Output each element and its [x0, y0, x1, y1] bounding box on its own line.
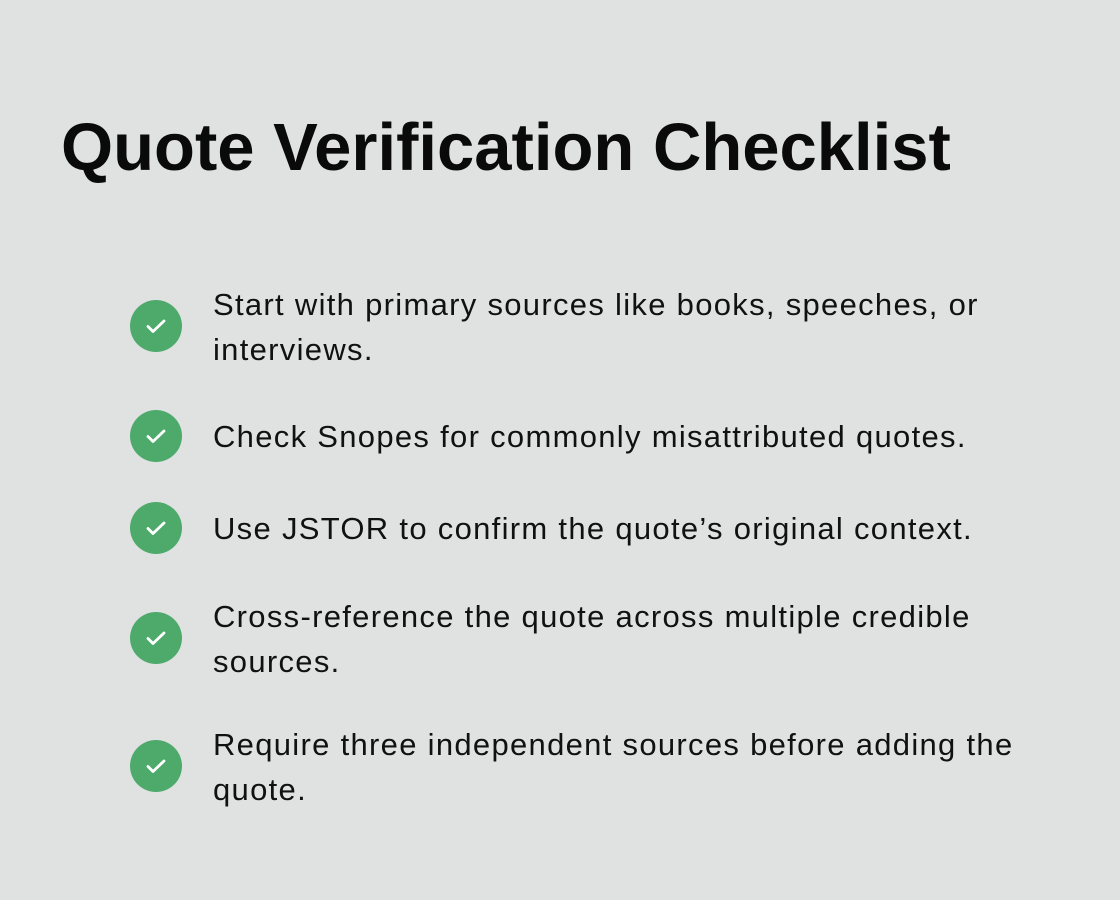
icon: check 4: [130, 612, 182, 664]
item 1: [130, 287, 979, 367]
text 4: Cross-reference the quote across multiple credible: [213, 599, 971, 634]
item 5: [130, 727, 1014, 807]
icon: check 3: [130, 502, 182, 554]
text 4: [213, 599, 971, 679]
text 5: quote.: [213, 772, 307, 807]
text 2: Check Snopes for commonly misattributed quotes.: [213, 419, 967, 454]
item 4: [130, 599, 971, 679]
text 1: Start with primary sources like books, speeches, or: [213, 287, 979, 322]
item 3: [130, 502, 973, 554]
item 2: [130, 410, 967, 462]
text 1: [213, 287, 979, 367]
text 4: sources.: [213, 644, 341, 679]
title: Quote Verification Checklist: [61, 110, 951, 185]
text 1: interviews.: [213, 332, 374, 367]
text 5: Require three independent sources before adding the: [213, 727, 1014, 762]
icon: check 5: [130, 740, 182, 792]
icon: check 2: [130, 410, 182, 462]
text 5: [213, 727, 1014, 807]
icon: check 1: [130, 300, 182, 352]
text 3: Use JSTOR to confirm the quote’s original context.: [213, 511, 973, 546]
